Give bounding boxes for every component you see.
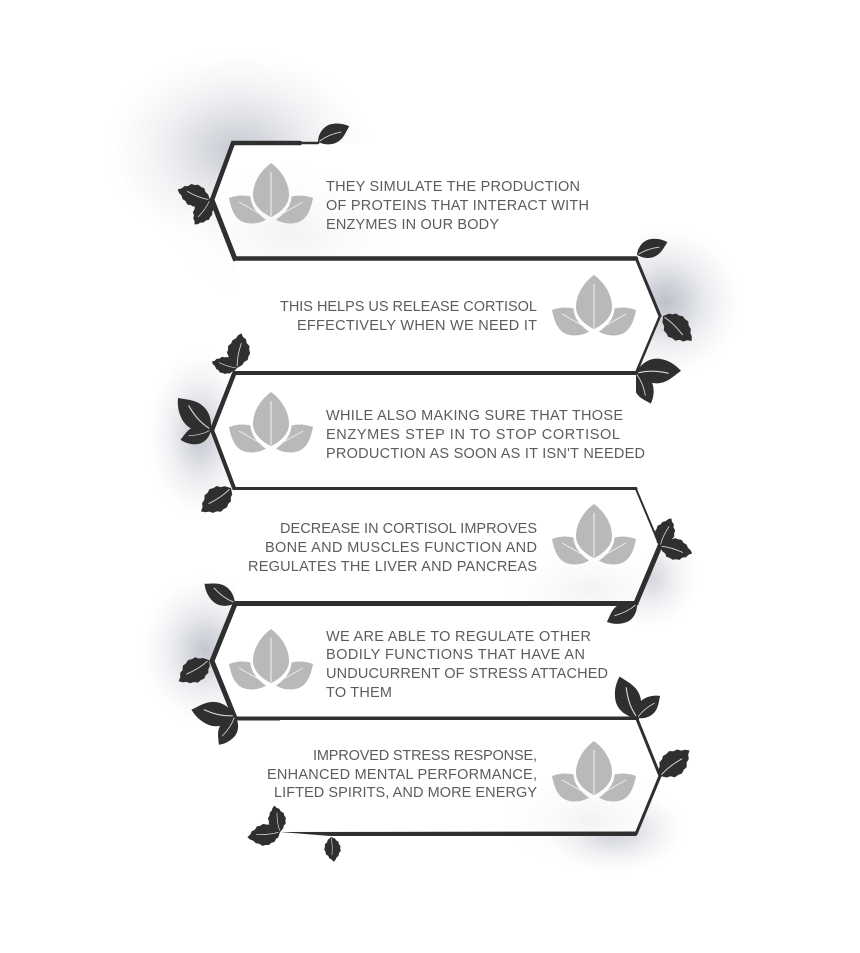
panel 2 text [280,299,537,334]
panel 6 [246,672,698,875]
panel 5 text: WE ARE ABLE TO REGULATE OTHER [326,629,591,645]
panel 3 leaves [168,332,252,522]
panel 3 outline [212,374,636,488]
background shadows [98,45,747,876]
panel 3 text: PRODUCTION AS SOON AS IT ISN'T NEEDED [326,446,645,462]
panel 1 text [326,179,589,233]
panel 5 leaves [172,577,642,750]
panel 1 text: THEY SIMULATE THE PRODUCTION [326,179,580,195]
panel 3 text: ENZYMES STEP IN TO STOP CORTISOL [326,427,620,443]
panel 5 icon [229,629,313,689]
panel 4 text: BONE AND MUSCLES FUNCTION AND [265,540,537,556]
panel 1 leaves [174,116,353,230]
panel 5 outline [212,604,637,718]
panel 5 text: TO THEM [326,685,392,701]
panel 2 [235,233,700,407]
panel 2 leaves [628,233,700,407]
panel 2 outline [235,258,660,374]
panel 3 [168,332,645,522]
panel 1 [160,116,640,315]
panel 4 text: REGULATES THE LIVER AND PANCREAS [248,559,537,575]
panel 6 icon [552,741,636,801]
panel 2 text: EFFECTIVELY WHEN WE NEED IT [297,318,537,334]
panel 1 icon [229,163,313,223]
panel 6 text [267,748,537,801]
panel 4 [235,489,695,645]
panel 1 text: OF PROTEINS THAT INTERACT WITH [326,198,589,214]
panel 5 [172,577,642,750]
panel 2 text: THIS HELPS US RELEASE CORTISOL [280,299,537,315]
panel 4 outline [235,489,660,604]
panel 1 outline [212,143,318,259]
panel 4 text: DECREASE IN CORTISOL IMPROVES [280,521,537,537]
panel 6 leaves [246,672,698,863]
panel 2 icon [552,275,636,335]
panel 4 text [248,521,537,575]
panel 6 outline [280,719,660,836]
panel 3 text [326,408,645,462]
panel 4 icon [552,504,636,564]
panel 6 text: LIFTED SPIRITS, AND MORE ENERGY [274,785,537,801]
panel 3 icon [229,392,313,452]
panel 4 leaves [651,514,695,564]
panel 5 text: BODILY FUNCTIONS THAT HAVE AN [326,647,585,663]
panel 5 text [326,629,608,701]
panel 5 text: UNDUCURRENT OF STRESS ATTACHED [326,666,608,682]
panel 6 text: ENHANCED MENTAL PERFORMANCE, [267,767,537,783]
panel 1 text: ENZYMES IN OUR BODY [326,217,499,233]
panel 3 text: WHILE ALSO MAKING SURE THAT THOSE [326,408,623,424]
panel 6 text: IMPROVED STRESS RESPONSE, [313,748,537,764]
